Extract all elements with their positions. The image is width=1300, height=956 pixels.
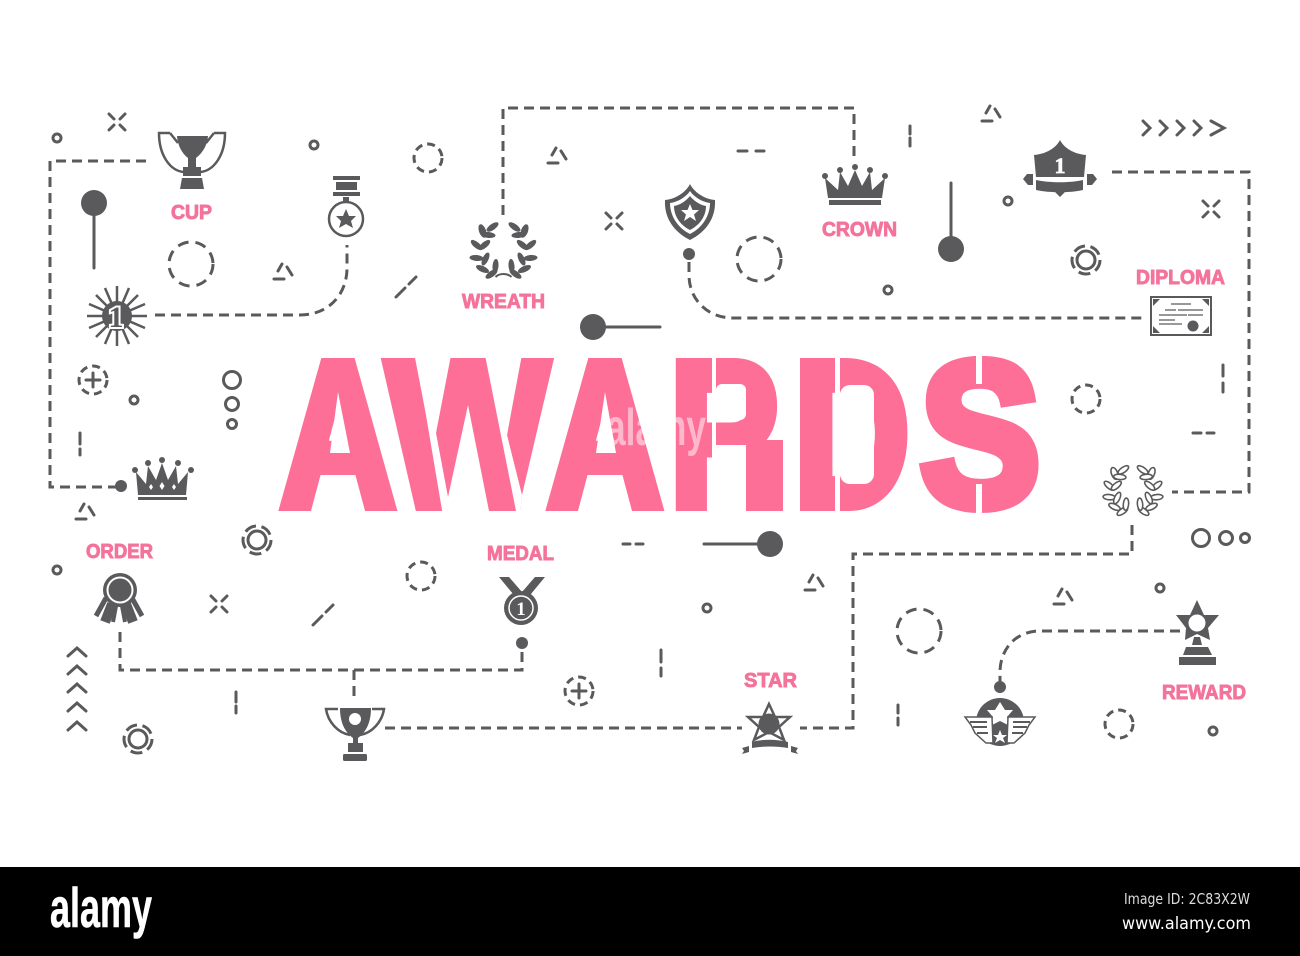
footer url: www.alamy.com	[1122, 914, 1251, 934]
icon: winged star emblem	[965, 698, 1035, 746]
watermark: alamy	[606, 399, 706, 457]
dashed connectors	[50, 108, 1249, 728]
title: AWARDS: W	[385, 320, 552, 549]
label: REWARD: REWARD	[1162, 682, 1246, 704]
R leg stencil block	[746, 440, 783, 511]
label: WREATH: WREATH	[462, 291, 545, 313]
icon: medal number one: 1	[516, 599, 526, 620]
icon: star with ribbon	[742, 704, 798, 754]
icon: medal number one	[499, 577, 545, 625]
icon: shield	[665, 184, 715, 240]
icon: cup	[159, 133, 225, 189]
title: AWARDS: R	[670, 321, 781, 549]
icon: sunburst number one	[87, 286, 147, 346]
label: ORDER: ORDER	[86, 541, 154, 563]
label: CUP: CUP	[171, 202, 212, 224]
footer logo: alamy	[50, 876, 152, 939]
icon: small crown	[132, 457, 194, 500]
footer image id: Image ID: 2C83X2W	[1124, 890, 1250, 908]
icon: reward star trophy	[1176, 600, 1219, 665]
title: AWARDS: D	[794, 320, 909, 548]
icon: trophy	[326, 708, 384, 761]
icon: wreath	[469, 221, 538, 280]
title: AWARDS: S	[920, 319, 1040, 549]
title: AWARDS: A	[548, 319, 662, 549]
decorative geometric marks	[53, 106, 1250, 753]
title: AWARDS	[281, 319, 1040, 549]
stencil cutouts	[311, 350, 982, 520]
icon: rosette order	[96, 573, 142, 622]
label: CROWN: CROWN	[822, 219, 897, 241]
icon: crown	[822, 164, 888, 205]
pin markers	[81, 183, 1006, 693]
label: MEDAL: MEDAL	[487, 543, 554, 565]
footer bar	[0, 867, 1300, 956]
icon: sunburst number one: 1	[108, 301, 124, 334]
icon: ribbon badge number one	[1023, 140, 1097, 197]
label: DIPLOMA: DIPLOMA	[1136, 267, 1225, 289]
label: STAR: STAR	[744, 670, 798, 692]
icon: diploma	[1151, 297, 1211, 335]
icon: small laurel wreath	[1103, 464, 1163, 517]
icon: ribbon badge number one: 1	[1054, 153, 1066, 178]
icon: hanging star medal	[329, 176, 363, 236]
title: AWARDS: A	[281, 319, 395, 549]
